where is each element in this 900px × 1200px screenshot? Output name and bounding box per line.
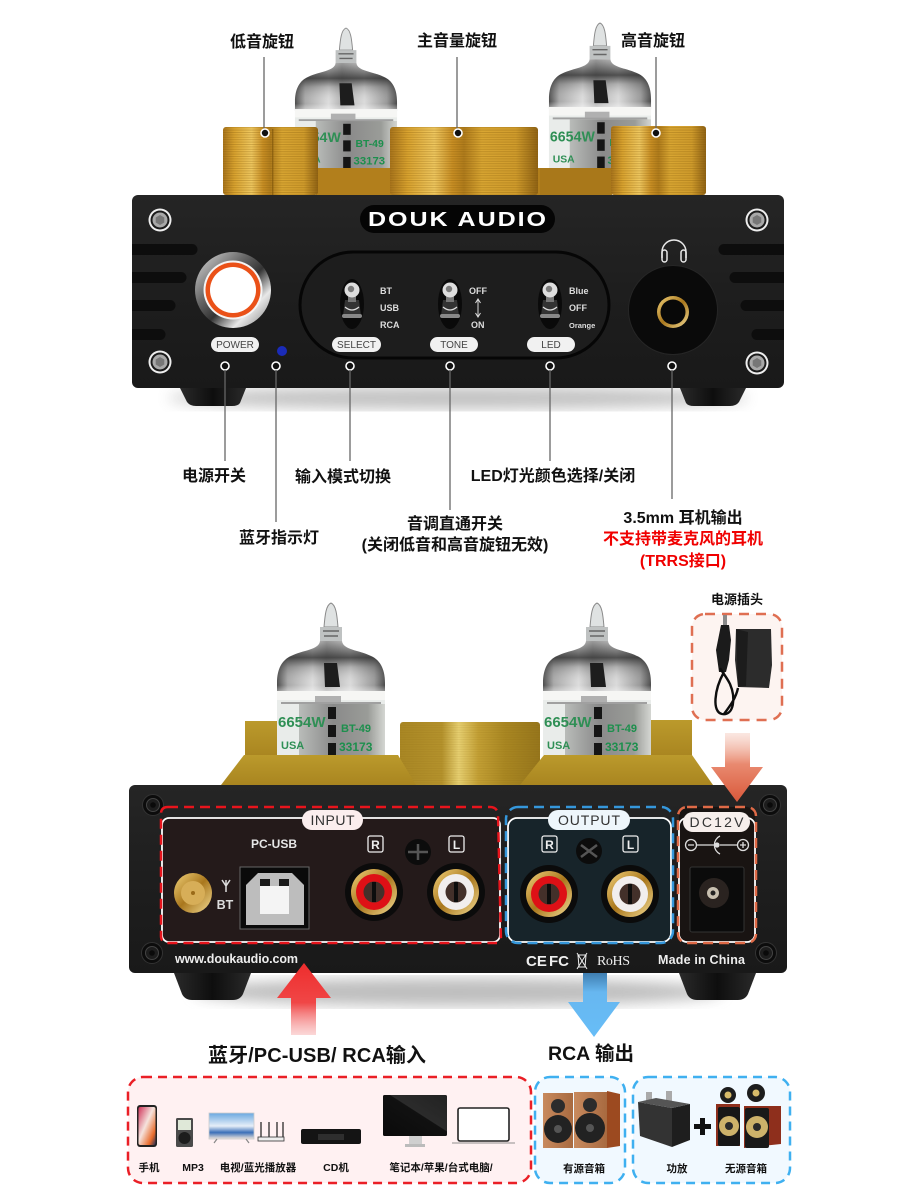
input L channel: L [453, 838, 460, 852]
device names [138, 1161, 493, 1174]
panel: active speakers [535, 1077, 625, 1183]
icon: laptop [452, 1108, 515, 1144]
panel: input devices [128, 1077, 531, 1183]
input select switch: SELECT [337, 340, 376, 351]
callout: headphone output: 3.5mm 耳机输出 [623, 508, 743, 527]
callout: tone bypass switch: 音调直通开关 [407, 514, 503, 533]
cooling vents [132, 244, 784, 340]
callout: power switch [182, 362, 246, 485]
made in China: Made in China [658, 953, 746, 967]
front chassis [132, 195, 784, 388]
front feet [180, 388, 746, 406]
callout: tone bypass switch [362, 362, 548, 554]
rear left vacuum tube [277, 603, 385, 755]
rear right gold base [520, 720, 713, 785]
DC jack [690, 867, 744, 932]
website: www.doukaudio.com [174, 952, 298, 966]
label: bass knob: 低音旋钮 [230, 32, 294, 51]
input select switch: BT [380, 286, 392, 296]
bottom product: tube amplifier rear view [129, 603, 787, 1006]
gold base [316, 168, 612, 195]
blue indicator light [277, 346, 287, 356]
orange arrow: power in [711, 733, 763, 802]
input panel: PC-USB [251, 837, 297, 851]
callout: input mode switch [295, 362, 391, 486]
red arrow: input [277, 963, 331, 1035]
label: treble knob [621, 31, 685, 137]
power adapter box [692, 614, 782, 720]
device names: MP3 [182, 1162, 204, 1174]
shadow under rear chassis [193, 978, 723, 1006]
rear left gold base [221, 721, 416, 785]
tone switch: OFF [469, 286, 487, 296]
output panel: OUTPUT [558, 812, 620, 828]
panel: amplifier and passive speakers [633, 1077, 790, 1183]
device names: 电视/蓝光播放器 [220, 1161, 297, 1174]
left vacuum tube [295, 28, 397, 168]
LED switch: Orange [569, 321, 595, 330]
top product: tube amplifier front view [132, 23, 784, 409]
device names: 笔记本/苹果/台式电脑/ [389, 1161, 493, 1174]
main volume knob [390, 127, 538, 195]
power button [195, 252, 271, 328]
LED switch [527, 279, 595, 352]
LED switch: LED [541, 340, 561, 351]
bass knob [223, 127, 318, 195]
tone switch: TONE [440, 340, 468, 351]
shadow under front chassis [168, 387, 748, 409]
certification marks: CE [526, 953, 547, 970]
input panel screw [405, 839, 431, 865]
DC power panel: DC12V [690, 814, 744, 830]
polarity symbol [686, 836, 748, 854]
input select switch [332, 279, 400, 352]
callout: headphone output: (TRRS接口) [640, 552, 726, 570]
output L channel: L [627, 838, 634, 852]
certification marks: FC [549, 953, 569, 970]
blue arrow: output [568, 973, 620, 1037]
callout: headphone output [603, 362, 763, 570]
brand logo: DOUK AUDIO [368, 208, 548, 231]
caption: active speakers: 有源音箱 [563, 1162, 605, 1175]
tone switch [430, 279, 487, 352]
output panel screw [576, 838, 602, 864]
label: main volume knob [417, 31, 497, 137]
right vacuum tube [549, 23, 651, 168]
callout: bluetooth indicator: 蓝牙指示灯 [239, 529, 319, 547]
input R channel [345, 836, 403, 921]
output L channel [601, 836, 659, 923]
headphone icon [662, 240, 686, 262]
certification marks [526, 953, 630, 970]
callout: input mode switch: 输入模式切换 [295, 467, 391, 486]
callout: LED colour [471, 362, 635, 485]
callout: LED colour: LED灯光颜色选择/关闭 [471, 466, 635, 485]
device names: CD机 [323, 1161, 349, 1174]
rear right vacuum tube [543, 603, 651, 755]
label: treble knob: 高音旋钮 [621, 31, 685, 50]
rear feet [174, 973, 756, 1000]
icon: phone [137, 1105, 157, 1147]
input L channel [427, 836, 485, 921]
icon: desktop monitor [383, 1095, 447, 1147]
certification marks: RoHS [597, 954, 630, 969]
icon: TV [209, 1113, 254, 1143]
heading: input sources: 蓝牙/PC-USB/ RCA输入 [208, 1044, 426, 1067]
DC power panel [678, 807, 756, 943]
icon: passive speakers [716, 1084, 781, 1148]
output R channel: R [545, 838, 554, 852]
output R channel [520, 836, 578, 923]
corner screws [148, 208, 768, 374]
callout: bluetooth indicator [239, 362, 319, 547]
icon: CD player [301, 1129, 361, 1144]
LED switch: OFF [569, 303, 587, 313]
headphone jack [628, 266, 718, 354]
caption: amplifier: 功放 [666, 1162, 688, 1175]
power adapter image [715, 615, 772, 714]
power label [211, 337, 259, 352]
callout: tone bypass switch: (关闭低音和高音旋钮无效) [362, 535, 548, 554]
rear chassis [129, 785, 787, 973]
heading: RCA output: RCA 输出 [548, 1042, 634, 1065]
output panel [506, 807, 673, 943]
brand logo [360, 205, 555, 233]
icon: amplifier [638, 1091, 690, 1147]
icon: MP3 player [176, 1118, 193, 1147]
device names: 手机 [138, 1161, 160, 1174]
caption: passive speakers: 无源音箱 [725, 1162, 767, 1175]
input select switch: RCA [380, 320, 400, 330]
input panel: INPUT [310, 812, 355, 828]
input select switch: USB [380, 303, 400, 313]
power plug label: 电源插头 [711, 592, 763, 607]
icon: plus [694, 1118, 711, 1135]
tone switch: ON [471, 320, 484, 330]
USB port [240, 867, 309, 929]
power label: POWER [216, 340, 254, 351]
input panel [161, 807, 501, 943]
callout: power switch: 电源开关 [182, 466, 246, 485]
rear screws [142, 794, 780, 964]
treble knob [611, 126, 706, 195]
input R channel: R [371, 838, 380, 852]
icon: active speakers [543, 1091, 620, 1148]
label: main volume knob: 主音量旋钮 [417, 31, 497, 50]
bluetooth antenna connector: BT [217, 898, 234, 912]
callout: headphone output: 不支持带麦克风的耳机 [603, 529, 763, 548]
icon: router [258, 1122, 284, 1141]
LED switch: Blue [569, 286, 589, 296]
switch panel [300, 252, 609, 358]
label: bass knob [230, 32, 294, 137]
bluetooth antenna connector [174, 873, 234, 913]
rear gold knob [400, 722, 540, 785]
